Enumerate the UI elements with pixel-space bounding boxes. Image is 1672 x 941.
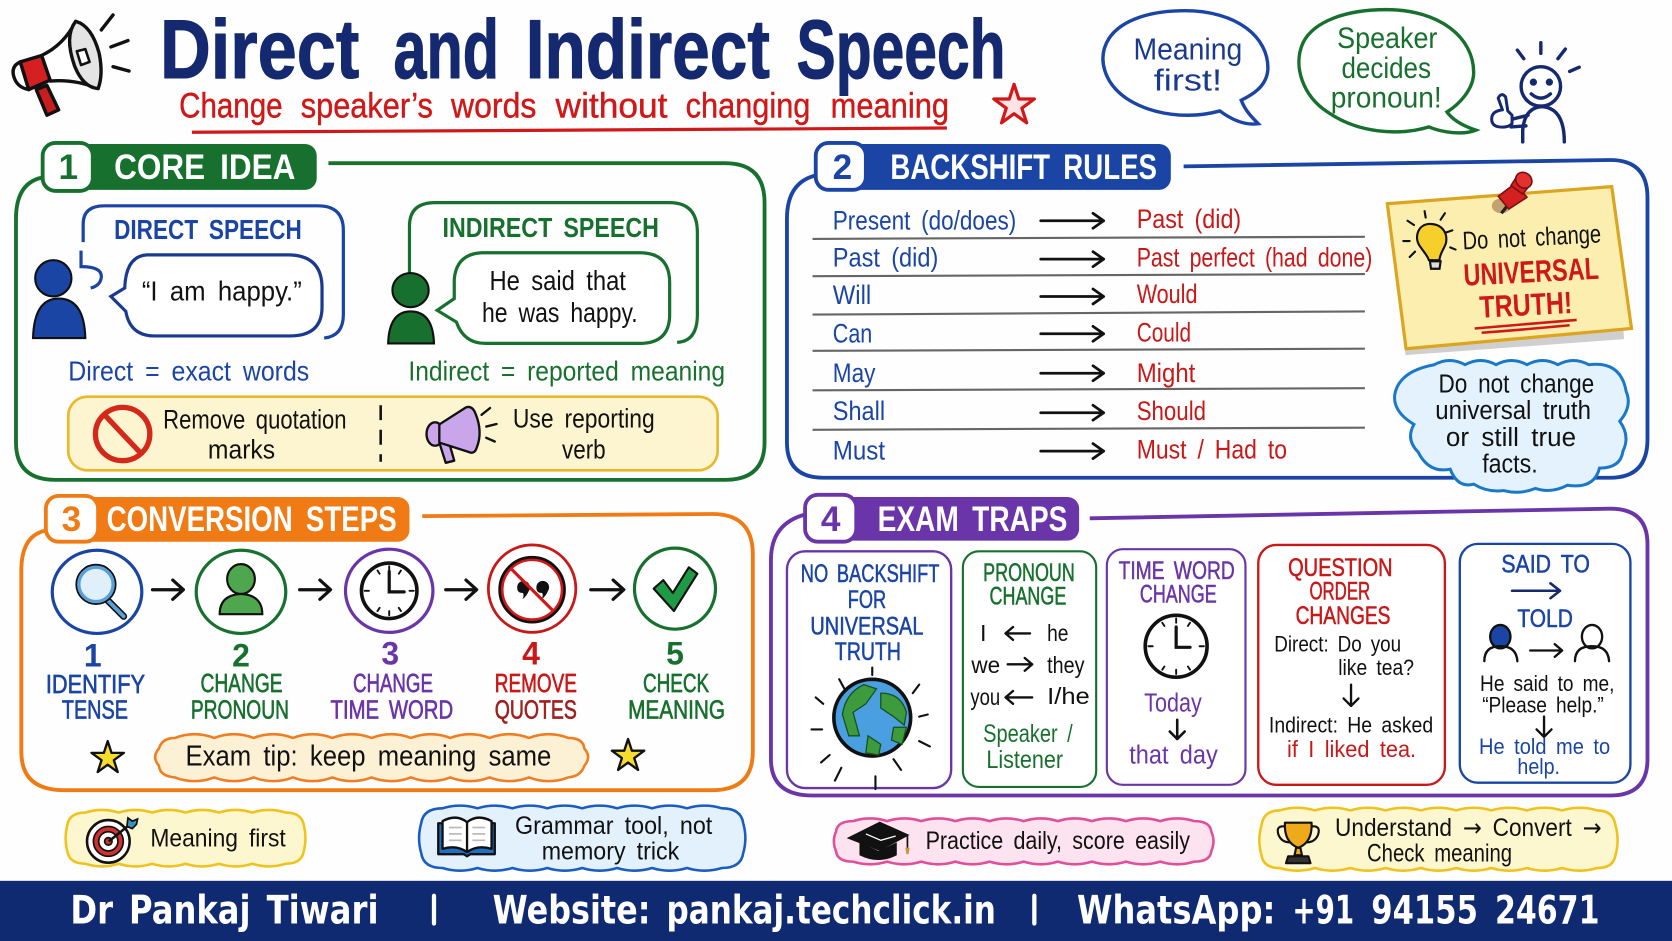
- direct speech heading: DIRECT SPEECH: [114, 214, 302, 245]
- step 1: identify tense: TENSE: [62, 697, 128, 725]
- speech bubble: speaker decides pronoun: Speaker: [1337, 22, 1437, 55]
- heading: core idea: CORE IDEA: [114, 148, 295, 187]
- exam tip callout: Exam tip: keep meaning same: [186, 741, 551, 773]
- icon: check mark: [654, 567, 697, 611]
- indirect speech bubble: he was happy.: [482, 297, 638, 328]
- icon: open book: [438, 818, 495, 856]
- step 1: identify tense: IDENTIFY: [46, 671, 145, 699]
- icon: green person: [388, 273, 434, 343]
- icon: clock: [361, 563, 417, 619]
- cloud: universal truth note: [1395, 360, 1628, 492]
- callout: practice daily: [834, 818, 1213, 864]
- card: time word change: that day: [1129, 742, 1218, 770]
- footer bar: pankaj.techclick.in: [666, 887, 996, 933]
- callout: remove quotes and reporting verb: verb: [562, 435, 606, 465]
- callout: remove quotes and reporting verb: [68, 397, 718, 470]
- icon: green person: [220, 564, 262, 614]
- speech bubble: speaker decides pronoun: pronoun!: [1331, 82, 1442, 115]
- arrow: [152, 580, 183, 599]
- sticky note: UNIVERSAL: [1463, 251, 1600, 293]
- callout: grammar tool: Grammar tool, not: [515, 813, 712, 840]
- card: question order changes: Indirect: He asked: [1269, 713, 1433, 738]
- rule table: Must / Had to: [1137, 435, 1287, 465]
- icon: target: [87, 818, 138, 863]
- card: question order changes: Direct: Do you: [1274, 632, 1401, 657]
- panel: backshift rules: [787, 143, 1647, 492]
- heading: backshift rules: BACKSHIFT RULES: [890, 148, 1157, 187]
- heading: exam traps: 4: [821, 500, 841, 539]
- step 2: change pronoun: PRONOUN: [191, 697, 289, 725]
- card: question order changes: ORDER: [1309, 578, 1370, 605]
- footer bar: 94155: [1371, 887, 1478, 933]
- step 1: identify tense: [46, 550, 145, 725]
- card: question order changes: like tea?: [1338, 655, 1414, 680]
- card: said to told: He told me to: [1479, 734, 1610, 759]
- callout: meaning first: [66, 810, 305, 866]
- card: question order changes: QUESTION: [1288, 555, 1393, 582]
- footer bar: WhatsApp:: [1077, 887, 1275, 933]
- step 4: remove quotes: [488, 545, 577, 725]
- card: time word change: TIME WORD: [1119, 558, 1235, 585]
- speech bubble: speaker decides pronoun: [1299, 10, 1476, 133]
- speech bubble: meaning first: [1103, 11, 1268, 124]
- step 1: identify tense: 1: [84, 637, 102, 673]
- card: no backshift for universal truth: [787, 551, 951, 789]
- subtitle: meaning: [831, 86, 949, 125]
- heading: backshift rules: [816, 143, 1171, 190]
- footer bar: Pankaj: [129, 887, 251, 933]
- callout: understand convert check: Understand → Convert →: [1335, 813, 1602, 842]
- heading: conversion steps: CONVERSION STEPS: [107, 500, 397, 539]
- callout: grammar tool: [419, 806, 745, 871]
- card: pronoun change: CHANGE: [990, 584, 1066, 611]
- speech bubble: speaker decides pronoun: decides: [1341, 52, 1431, 85]
- card: pronoun change: we: [970, 652, 1000, 678]
- title: [160, 3, 1006, 96]
- step 2: change pronoun: 2: [232, 637, 250, 673]
- step 5: check meaning: 5: [666, 635, 684, 671]
- heading: conversion steps: 3: [62, 500, 81, 539]
- footer bar: Tiwari: [267, 887, 379, 933]
- rule table: Past (did): [1137, 204, 1241, 234]
- direct speech bubble: “I am happy.”: [142, 276, 302, 307]
- rule table: Shall: [833, 396, 885, 426]
- step 2: change pronoun: [191, 550, 289, 725]
- arrow: [300, 580, 331, 599]
- card: question order changes: if I liked tea.: [1287, 736, 1416, 762]
- card: question order changes: [1258, 545, 1445, 785]
- heading: exam traps: EXAM TRAPS: [878, 500, 1067, 539]
- caption: direct: Direct = exact words: [68, 356, 309, 387]
- footer bar: +91: [1292, 887, 1354, 933]
- callout: grammar tool: memory trick: [542, 838, 680, 865]
- rule table: Will: [833, 280, 871, 310]
- rule table: Present (do/does): [833, 205, 1016, 235]
- title: Indirect: [526, 3, 770, 96]
- title: Speech: [797, 3, 1006, 96]
- heading: conversion steps: [46, 496, 409, 542]
- step 3: change time word: CHANGE: [353, 670, 433, 698]
- direct speech bubble: [111, 255, 322, 336]
- indirect speech bubble: He said that: [489, 265, 626, 296]
- icon: star left: [91, 741, 124, 772]
- card: pronoun change: you: [970, 684, 1000, 710]
- title: and: [393, 3, 499, 96]
- card: pronoun change: I/he: [1047, 683, 1090, 709]
- panel: conversion steps: [21, 496, 753, 790]
- step 3: change time word: TIME WORD: [331, 697, 453, 725]
- rule table: May: [833, 358, 876, 388]
- direct speech frame: [81, 206, 343, 338]
- rule table: Past perfect (had done): [1137, 243, 1372, 273]
- step 4: remove quotes: QUOTES: [495, 697, 577, 725]
- callout: understand convert check: Check meaning: [1367, 841, 1512, 868]
- footer bar: Website:: [493, 887, 650, 933]
- cloud: universal truth note: Do not change: [1438, 370, 1594, 398]
- card: pronoun change: [963, 551, 1096, 787]
- rule table: Should: [1137, 396, 1206, 426]
- caption: indirect: Indirect = reported meaning: [408, 356, 725, 387]
- step 4: remove quotes: REMOVE: [495, 670, 577, 698]
- footer bar: [0, 881, 1672, 941]
- rule table: Would: [1137, 279, 1197, 309]
- heading: exam traps: [805, 495, 1079, 542]
- card: pronoun change: I: [980, 620, 986, 646]
- callout: remove quotes and reporting verb: Use reporting: [513, 404, 655, 434]
- card: no backshift for universal truth: NO BACKSHIFT: [801, 561, 939, 588]
- cloud: universal truth note: or still true: [1446, 424, 1576, 452]
- rule table: [813, 204, 1372, 466]
- card: time word change: Today: [1144, 689, 1202, 717]
- step 5: check meaning: CHECK: [643, 670, 709, 698]
- subtitle: words: [450, 86, 536, 125]
- icon: no sign: [95, 407, 150, 461]
- rule table: Can: [833, 318, 872, 348]
- icon: thumbs-up stick figure: [1492, 43, 1579, 142]
- speech bubble: meaning first: first!: [1154, 63, 1222, 98]
- title: Direct: [160, 3, 359, 96]
- card: said to told: He said to me,: [1480, 671, 1614, 696]
- callout: meaning first: Meaning first: [150, 826, 286, 853]
- subtitle underline: [192, 128, 947, 132]
- indirect speech bubble: [437, 253, 670, 343]
- icon: red megaphone: [13, 15, 129, 115]
- rule table: Must: [833, 436, 886, 466]
- icon: star right: [612, 739, 644, 770]
- icon: magnifier: [76, 565, 124, 616]
- rule table: Might: [1137, 358, 1196, 388]
- step 3: change time word: [331, 549, 453, 725]
- card: pronoun change: PRONOUN: [983, 560, 1075, 587]
- rule table: Could: [1137, 317, 1191, 347]
- icon: clock: [1145, 615, 1207, 677]
- sticky note: TRUTH!: [1479, 285, 1573, 325]
- icon: globe: [811, 668, 930, 789]
- icon: red pin: [1492, 169, 1535, 213]
- sticky note: Do not change: [1462, 220, 1602, 256]
- exam tip callout: [155, 734, 588, 781]
- subtitle: without: [555, 86, 668, 125]
- speech bubble: meaning first: Meaning: [1134, 32, 1242, 67]
- card: said to told: SAID TO: [1501, 552, 1590, 579]
- card: pronoun change: he: [1047, 620, 1068, 646]
- subtitle: Change: [179, 86, 283, 125]
- icon: light bulb: [1403, 211, 1456, 269]
- rule table: Past (did): [833, 243, 938, 273]
- card: said to told: [1460, 544, 1630, 783]
- step 2: change pronoun: CHANGE: [200, 670, 283, 698]
- callout: understand convert check: [1259, 808, 1618, 871]
- subtitle: changing: [686, 86, 810, 125]
- panel: core idea: [16, 143, 765, 480]
- card: no backshift for universal truth: UNIVERSAL: [810, 614, 923, 641]
- card: no backshift for universal truth: FOR: [848, 587, 886, 614]
- callout: practice daily: Practice daily, score easily: [926, 828, 1191, 855]
- panel: exam traps: [771, 495, 1647, 796]
- indirect speech frame: [409, 203, 697, 342]
- arrow: [446, 580, 477, 599]
- step 4: remove quotes: 4: [522, 635, 540, 671]
- card: time word change: [1107, 549, 1245, 785]
- footer bar: Dr: [70, 887, 113, 933]
- heading: core idea: [43, 143, 317, 191]
- card: said to told: “Please help.”: [1482, 692, 1604, 717]
- card: no backshift for universal truth: TRUTH: [835, 639, 901, 666]
- icon: speaker and listener: [1484, 625, 1609, 661]
- icon: purple megaphone: [427, 407, 497, 463]
- callout: remove quotes and reporting verb: marks: [208, 435, 275, 465]
- card: pronoun change: they: [1047, 652, 1085, 678]
- heading: backshift rules: 2: [833, 148, 852, 187]
- subtitle: [179, 86, 949, 125]
- icon: graduation cap: [847, 822, 910, 860]
- indirect speech heading: INDIRECT SPEECH: [443, 212, 659, 243]
- footer bar: 24671: [1495, 887, 1599, 933]
- card: pronoun change: Speaker /: [983, 721, 1073, 748]
- cloud: universal truth note: facts.: [1482, 450, 1538, 478]
- card: said to told: TOLD: [1517, 606, 1573, 633]
- step 5: check meaning: MEANING: [628, 697, 725, 725]
- icon: star: [994, 84, 1034, 123]
- icon: trophy: [1278, 823, 1319, 863]
- subtitle: speaker’s: [301, 86, 433, 125]
- step 5: check meaning: [628, 548, 725, 725]
- arrow: [591, 580, 624, 599]
- card: question order changes: CHANGES: [1296, 603, 1390, 630]
- callout: remove quotes and reporting verb: Remove quotation: [163, 405, 347, 435]
- card: time word change: CHANGE: [1140, 582, 1217, 609]
- sticky note: [1387, 169, 1631, 355]
- card: said to told: help.: [1517, 754, 1560, 779]
- icon: no quotes: [500, 558, 564, 622]
- icon: blue person: [33, 260, 85, 338]
- cloud: universal truth note: universal truth: [1435, 397, 1591, 425]
- card: pronoun change: Listener: [986, 747, 1063, 774]
- heading: core idea: 1: [58, 148, 78, 187]
- step 3: change time word: 3: [381, 635, 399, 671]
